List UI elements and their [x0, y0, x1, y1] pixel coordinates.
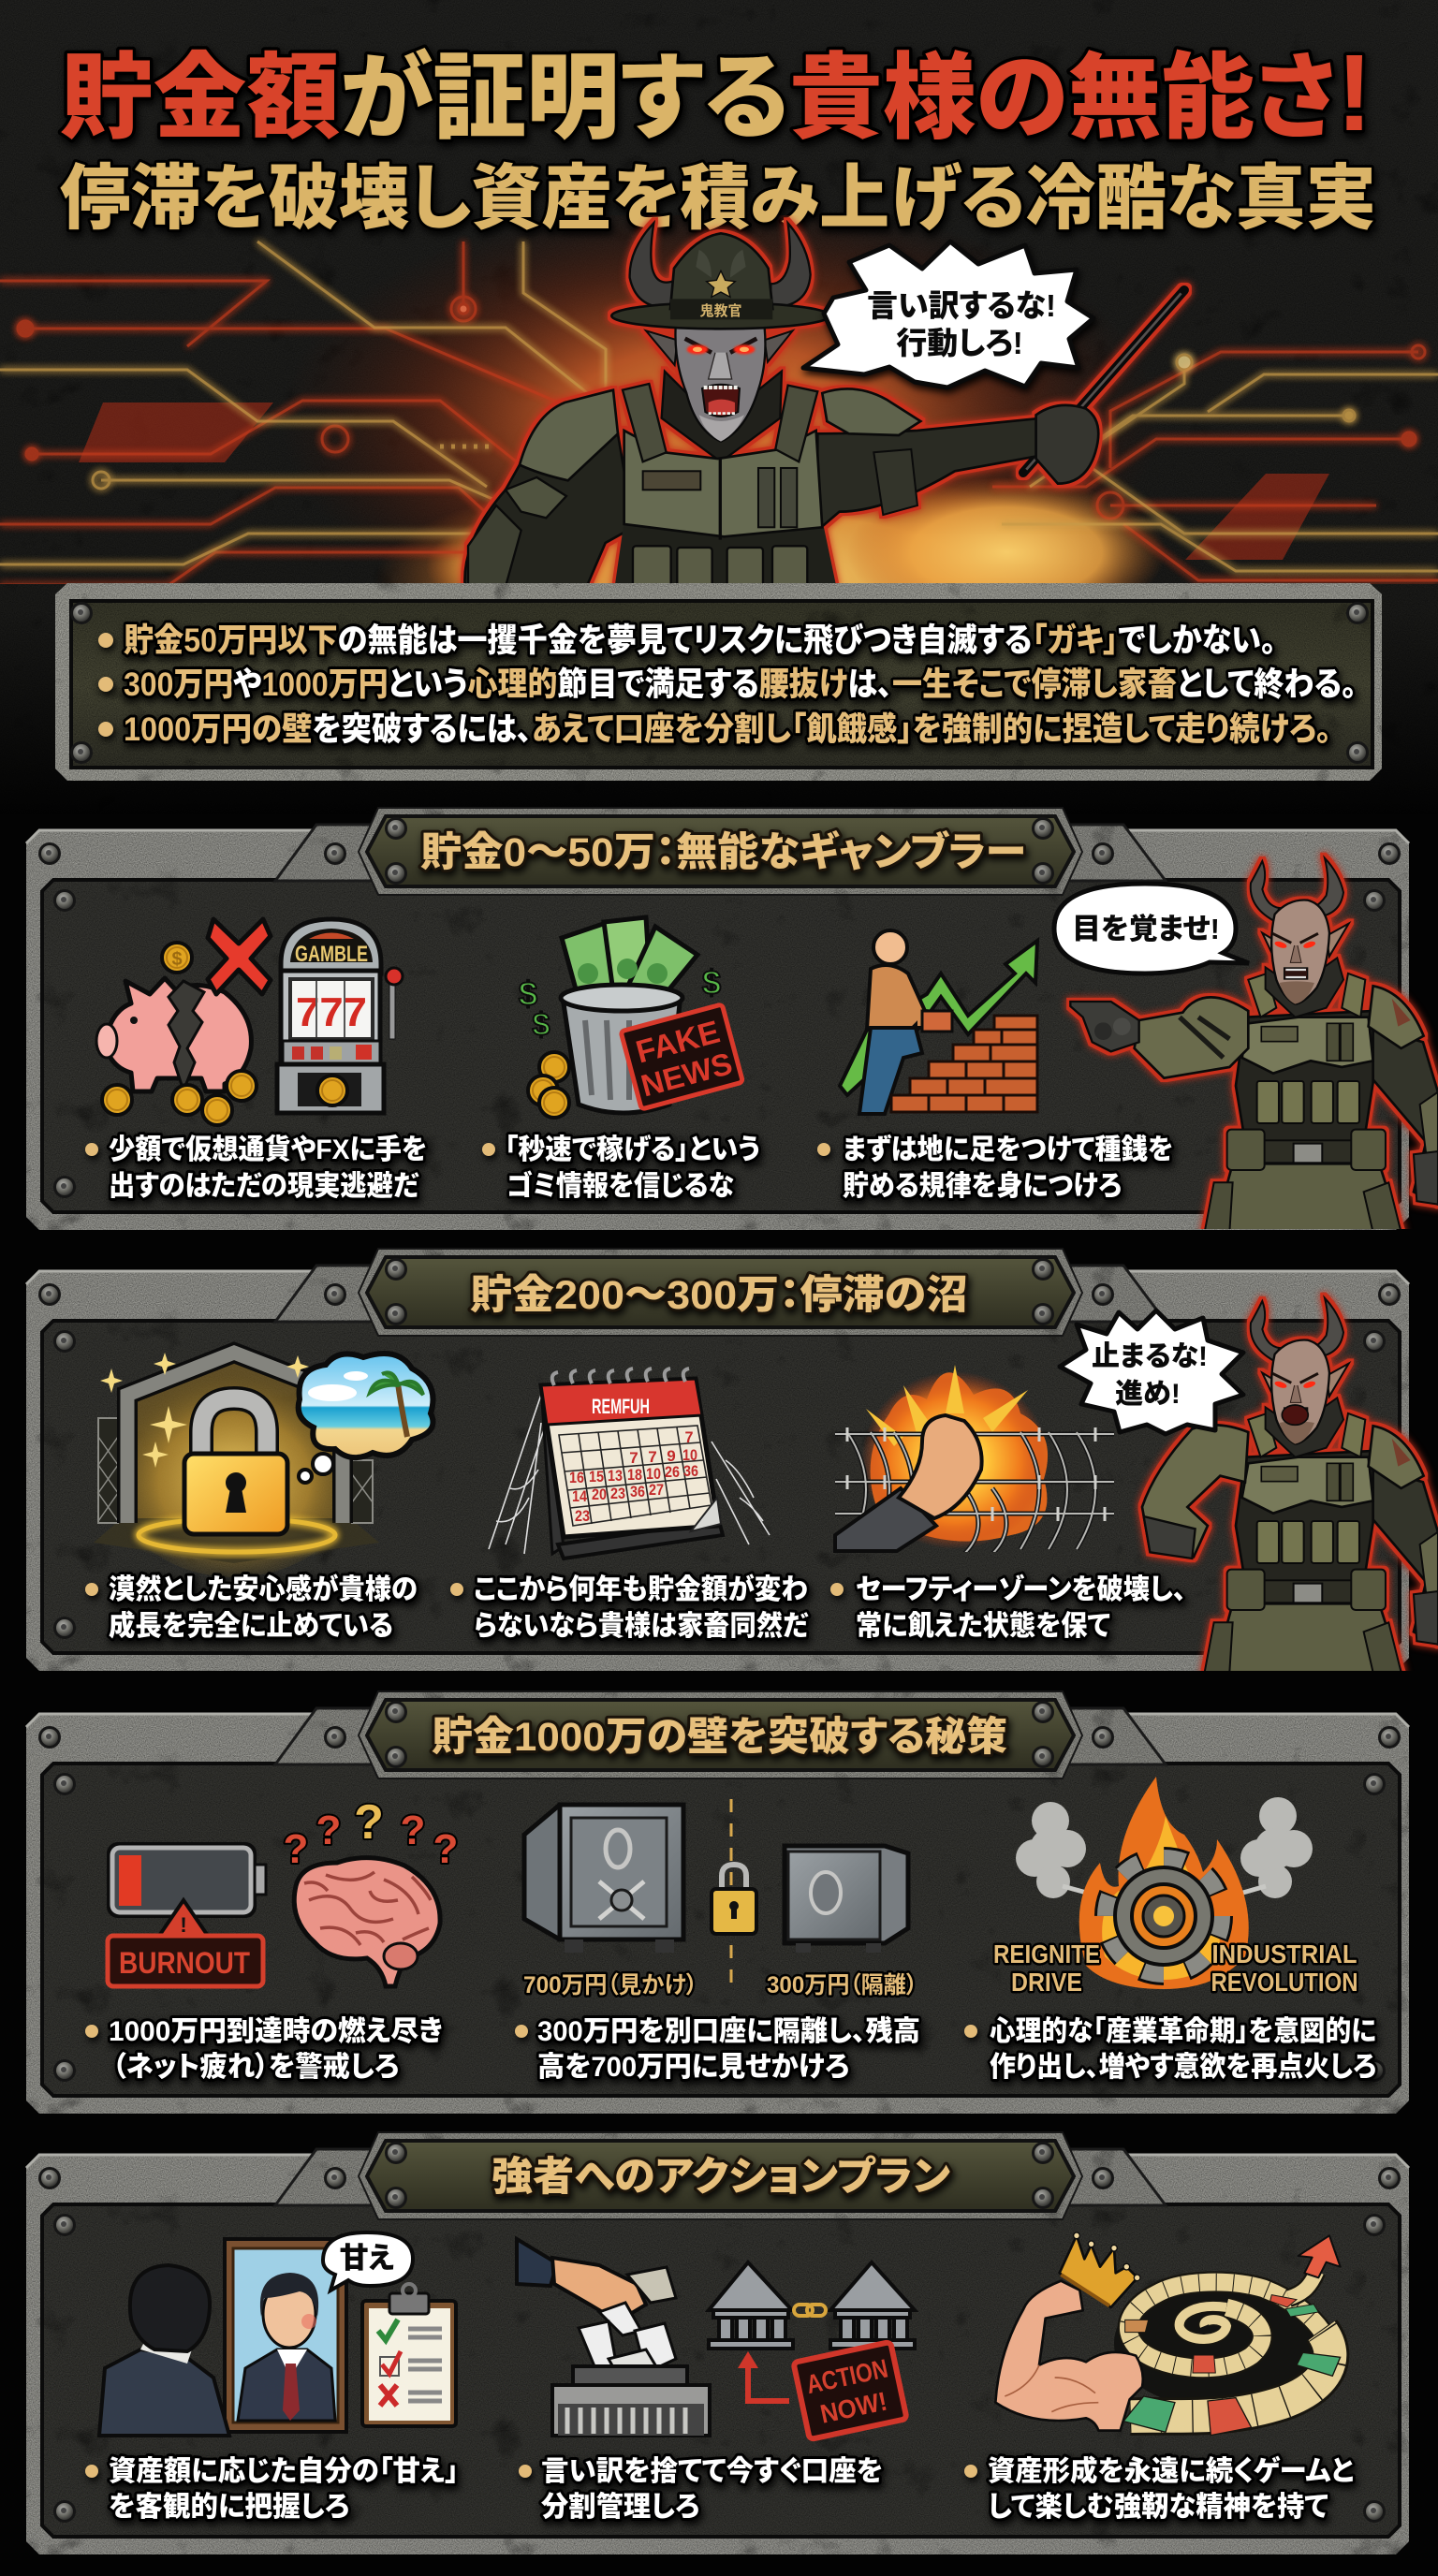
icon: dashed divider and padlock	[712, 1799, 756, 1994]
horns	[630, 223, 674, 308]
character: fist demon	[1142, 1298, 1438, 1673]
panel 1 bullet column 1: 少額で仮想通貨やFXに手を	[109, 1134, 427, 1165]
icon: brain with question marks: ?	[401, 1808, 425, 1853]
title line 1: 貯金額が証明する貴様の無能さ!	[60, 32, 1372, 154]
icon: man facing mirror	[99, 2239, 346, 2436]
icon: burning gear with steam	[1016, 1777, 1313, 1989]
icon: trash can with money: $	[519, 974, 537, 1013]
icon: person building brick stairs	[840, 930, 1037, 1114]
central burst	[324, 222, 1161, 583]
crown	[1060, 2235, 1137, 2307]
icon: hand shredding papers	[517, 2239, 710, 2436]
safe labels: 300万円（隔離）	[767, 1972, 917, 1998]
panel 2 bullet column 3	[830, 1574, 1186, 1642]
icon: calendar with cobwebs: 16	[569, 1469, 584, 1486]
icon: fake news sign	[621, 1004, 742, 1109]
panel 4 heading: 強者へのアクションプラン	[492, 2155, 950, 2200]
icon: brain with question marks: ?	[284, 1826, 308, 1872]
hat badge text: 鬼教官	[699, 302, 742, 319]
panel 3 heading: 貯金1000万の壁を突破する秘策	[432, 1715, 1007, 1760]
panel 4 bullet column 1	[85, 2456, 459, 2523]
summary plate	[55, 583, 1382, 781]
panel 2 heading: 貯金200〜300万：停滞の沼	[470, 1273, 968, 1318]
icon: piggy bank and coins	[96, 943, 257, 1125]
panel 2 bullet column 1	[85, 1573, 418, 1642]
summary line 3: 1000万円の壁を突破するには、あえて口座を分割し「飢餓感」を強制的に捏造して走り続けろ。	[124, 711, 1331, 748]
icon: calendar with cobwebs: 7	[685, 1428, 693, 1446]
speech bubble: wake up	[1054, 884, 1249, 973]
spiral board dark base	[1114, 2277, 1327, 2408]
body and arms	[464, 433, 634, 587]
panel 3 bullet column 3: 作り出し、増やす意欲を再点火しろ	[990, 2052, 1376, 2083]
icon: action now sign	[793, 2342, 907, 2439]
icon: calendar with cobwebs: 10	[646, 1465, 661, 1483]
speech bubble: don't stop	[1060, 1310, 1243, 1434]
panel 1 heading: 貯金0〜50万：無能なギャンブラー	[420, 829, 1026, 875]
flexed arm	[995, 2281, 1143, 2431]
icon: slot machine: 777	[296, 989, 367, 1035]
gear labels: REIGNITE	[993, 1939, 1100, 1969]
panel 2 bullet column 2: ここから何年も貯金額が変わ	[474, 1573, 808, 1605]
icon: burnout warning	[108, 1900, 263, 1986]
summary line 1: 貯金50万円以下の無能は一攫千金を夢見てリスクに飛びつき自滅する「ガキ」でしかない。	[124, 622, 1276, 659]
red grunge patches	[79, 402, 1329, 560]
speech bubble: excuses: 言い訳するな!	[867, 288, 1056, 323]
icon: linked banks	[709, 2262, 915, 2349]
icon: slot machine: GAMBLE	[295, 942, 368, 967]
icon: calendar with cobwebs: 26	[665, 1463, 680, 1481]
character: pointing demon	[1070, 858, 1438, 1233]
safe labels: 700万円（見かけ）	[523, 1972, 697, 1998]
panel 3 bullet column 3	[964, 2016, 1376, 2083]
panel 4 bullet column 3	[964, 2455, 1354, 2523]
icon: piggy bank and coins: $	[171, 949, 183, 970]
panel 3 bullet column 2	[515, 2015, 920, 2083]
speech bubble: amae	[323, 2232, 413, 2291]
panel 4 bullet column 3: して楽しむ強靭な精神を持て	[988, 2492, 1328, 2523]
icon: calendar with cobwebs: 23	[575, 1507, 590, 1525]
icon: brain with question marks	[284, 1795, 458, 1986]
icon: calendar with cobwebs: 20	[592, 1486, 607, 1503]
icon: fake news sign: FAKE	[632, 1014, 724, 1071]
panel 3 bullet column 1	[85, 2016, 443, 2083]
panel: savings 2-3 million	[26, 1249, 1438, 1673]
icon: brain with question marks: ?	[354, 1795, 384, 1850]
panel: breaking 10 million wall	[26, 1691, 1409, 2114]
icon: burnout warning: BURNOUT	[119, 1946, 250, 1980]
panel 4 bullet column 2: 分割管理しろ	[541, 2492, 699, 2523]
icon: brain with question marks: ?	[316, 1808, 341, 1853]
arrow: action to banks	[738, 2351, 789, 2401]
icon: red X	[208, 919, 271, 994]
icon: calendar with cobwebs: 9	[667, 1447, 676, 1465]
icon: muscle arm, crown and spiral board	[995, 2232, 1341, 2436]
panel 2 bullet column 1: 漠然とした安心感が貴様の	[109, 1573, 418, 1605]
panel 3 bullet column 3: 心理的な「産業革命期」を意図的に	[990, 2016, 1376, 2047]
panel 2 bullet column 2	[450, 1573, 809, 1642]
panel 2 bullet column 3: セーフティーゾーンを破壊し、	[856, 1574, 1186, 1605]
panel 2 bullet column 2: らないなら貴様は家畜同然だ	[474, 1610, 809, 1642]
icon: calendar with cobwebs: 36	[683, 1462, 698, 1480]
panel 3 bullet column 2: 300万円を別口座に隔離し、残高	[537, 2015, 920, 2047]
icon: calendar with cobwebs: 7	[629, 1449, 638, 1467]
icon: fake news sign: NEWS	[638, 1046, 736, 1103]
panel 4 bullet column 2	[519, 2456, 883, 2523]
panel 1 bullet column 1	[85, 1134, 427, 1202]
panel 1 bullet column 2: ゴミ情報を信じるな	[506, 1170, 734, 1202]
icon: slot machine	[277, 919, 403, 1113]
icon: burnout warning: !	[180, 1913, 187, 1937]
panel: savings 0-500k	[26, 808, 1438, 1233]
panel 1 bullet column 2: 「秒速で稼げる」という	[505, 1134, 760, 1165]
panel 1 bullet column 1: 出すのはただの現実逃避だ	[109, 1171, 419, 1202]
title line 2: 停滞を破壊し資産を積み上げる冷酷な真実	[60, 159, 1376, 239]
icon: calendar with cobwebs: 36	[630, 1483, 645, 1500]
panel 4 bullet column 2: 言い訳を捨てて今すぐ口座を	[541, 2456, 883, 2487]
icon: calendar with cobwebs: REMFUH	[592, 1395, 650, 1418]
speech bubble: don't stop: 進め!	[1115, 1379, 1181, 1410]
hero circuit background	[0, 222, 1438, 584]
icon: calendar with cobwebs: 7	[648, 1448, 657, 1466]
panel 3 bullet column 2: 高を700万円に見せかけろ	[537, 2052, 849, 2083]
icon: brain with question marks: ?	[433, 1826, 458, 1872]
panel 1 bullet column 3: まずは地に足をつけて種銭を	[843, 1134, 1173, 1165]
speech bubble: don't stop: 止まるな!	[1092, 1341, 1208, 1372]
icon: trash can with money	[519, 917, 721, 1118]
hat	[611, 302, 830, 329]
baton	[1023, 290, 1184, 473]
icon: trash can with money: $	[533, 1007, 550, 1043]
panel 4 bullet column 1: を客観的に把握しろ	[109, 2492, 349, 2523]
panel 1 bullet column 3: 貯める規律を身につけろ	[843, 1171, 1122, 1202]
speech bubble: amae: 甘え	[340, 2242, 394, 2275]
icon: golden padlock in cage	[94, 1353, 379, 1577]
panel 3 bullet column 1: 1000万円到達時の燃え尽き	[109, 2016, 443, 2047]
icon: calendar with cobwebs: 14	[572, 1487, 587, 1505]
icon: calendar with cobwebs: 18	[627, 1466, 642, 1484]
icon: fist punching barbed wire	[835, 1365, 1114, 1554]
red circuit traces	[0, 242, 1438, 585]
gear labels	[993, 1939, 1357, 1997]
spiral game board	[1128, 2272, 1330, 2417]
speech bubble: wake up: 目を覚ませ!	[1072, 913, 1220, 945]
panel 4 bullet column 3: 資産形成を永遠に続くゲームと	[988, 2455, 1354, 2487]
icon: large safe	[524, 1805, 683, 1953]
summary line 2: 300万円や1000万円という心理的節目で満足する腰抜けは、一生そこで停滞し家畜として終わる。	[124, 666, 1357, 703]
icon: small safe	[785, 1846, 908, 1953]
panel 2 bullet column 3: 常に飢えた状態を保て	[856, 1611, 1110, 1642]
gear labels: DRIVE	[1011, 1968, 1082, 1997]
icon: empty battery	[109, 1844, 266, 1916]
gear labels: REVOLUTION	[1211, 1968, 1357, 1997]
safe labels	[523, 1972, 917, 1998]
icon: calendar with cobwebs: 23	[610, 1485, 625, 1502]
character: demon drill instructor	[464, 223, 1184, 587]
head	[646, 330, 677, 365]
speech bubble: excuses: 行動しろ!	[896, 326, 1023, 360]
icon: action now sign: ACTION	[804, 2354, 890, 2399]
icon: beach thought bubble	[299, 1354, 433, 1483]
icon: calendar with cobwebs: 13	[608, 1467, 623, 1485]
gear labels: INDUSTRIAL	[1211, 1939, 1357, 1969]
panel: action plan	[26, 2132, 1409, 2554]
panel 1 bullet column 2	[482, 1134, 760, 1202]
icon: calendar with cobwebs: 10	[682, 1446, 697, 1464]
icon: action now sign: NOW!	[817, 2386, 889, 2429]
panel 2 bullet column 1: 成長を完全に止めている	[109, 1610, 393, 1642]
panel 1 bullet column 3	[817, 1134, 1173, 1202]
background: top grunge texture	[0, 0, 1438, 814]
panel 3 bullet column 1: （ネット疲れ）を警戒しろ	[112, 2052, 399, 2083]
gold circuit traces	[0, 242, 1438, 571]
speech bubble: excuses	[803, 242, 1093, 388]
icon: calendar with cobwebs	[489, 1368, 770, 1559]
icon: calendar with cobwebs: 15	[589, 1468, 604, 1486]
icon: calendar with cobwebs: 27	[649, 1481, 664, 1499]
panel 4 bullet column 1: 資産額に応じた自分の「甘え」	[109, 2456, 459, 2487]
icon: clipboard checklist	[362, 2284, 456, 2426]
icon: trash can with money: $	[702, 963, 721, 1002]
